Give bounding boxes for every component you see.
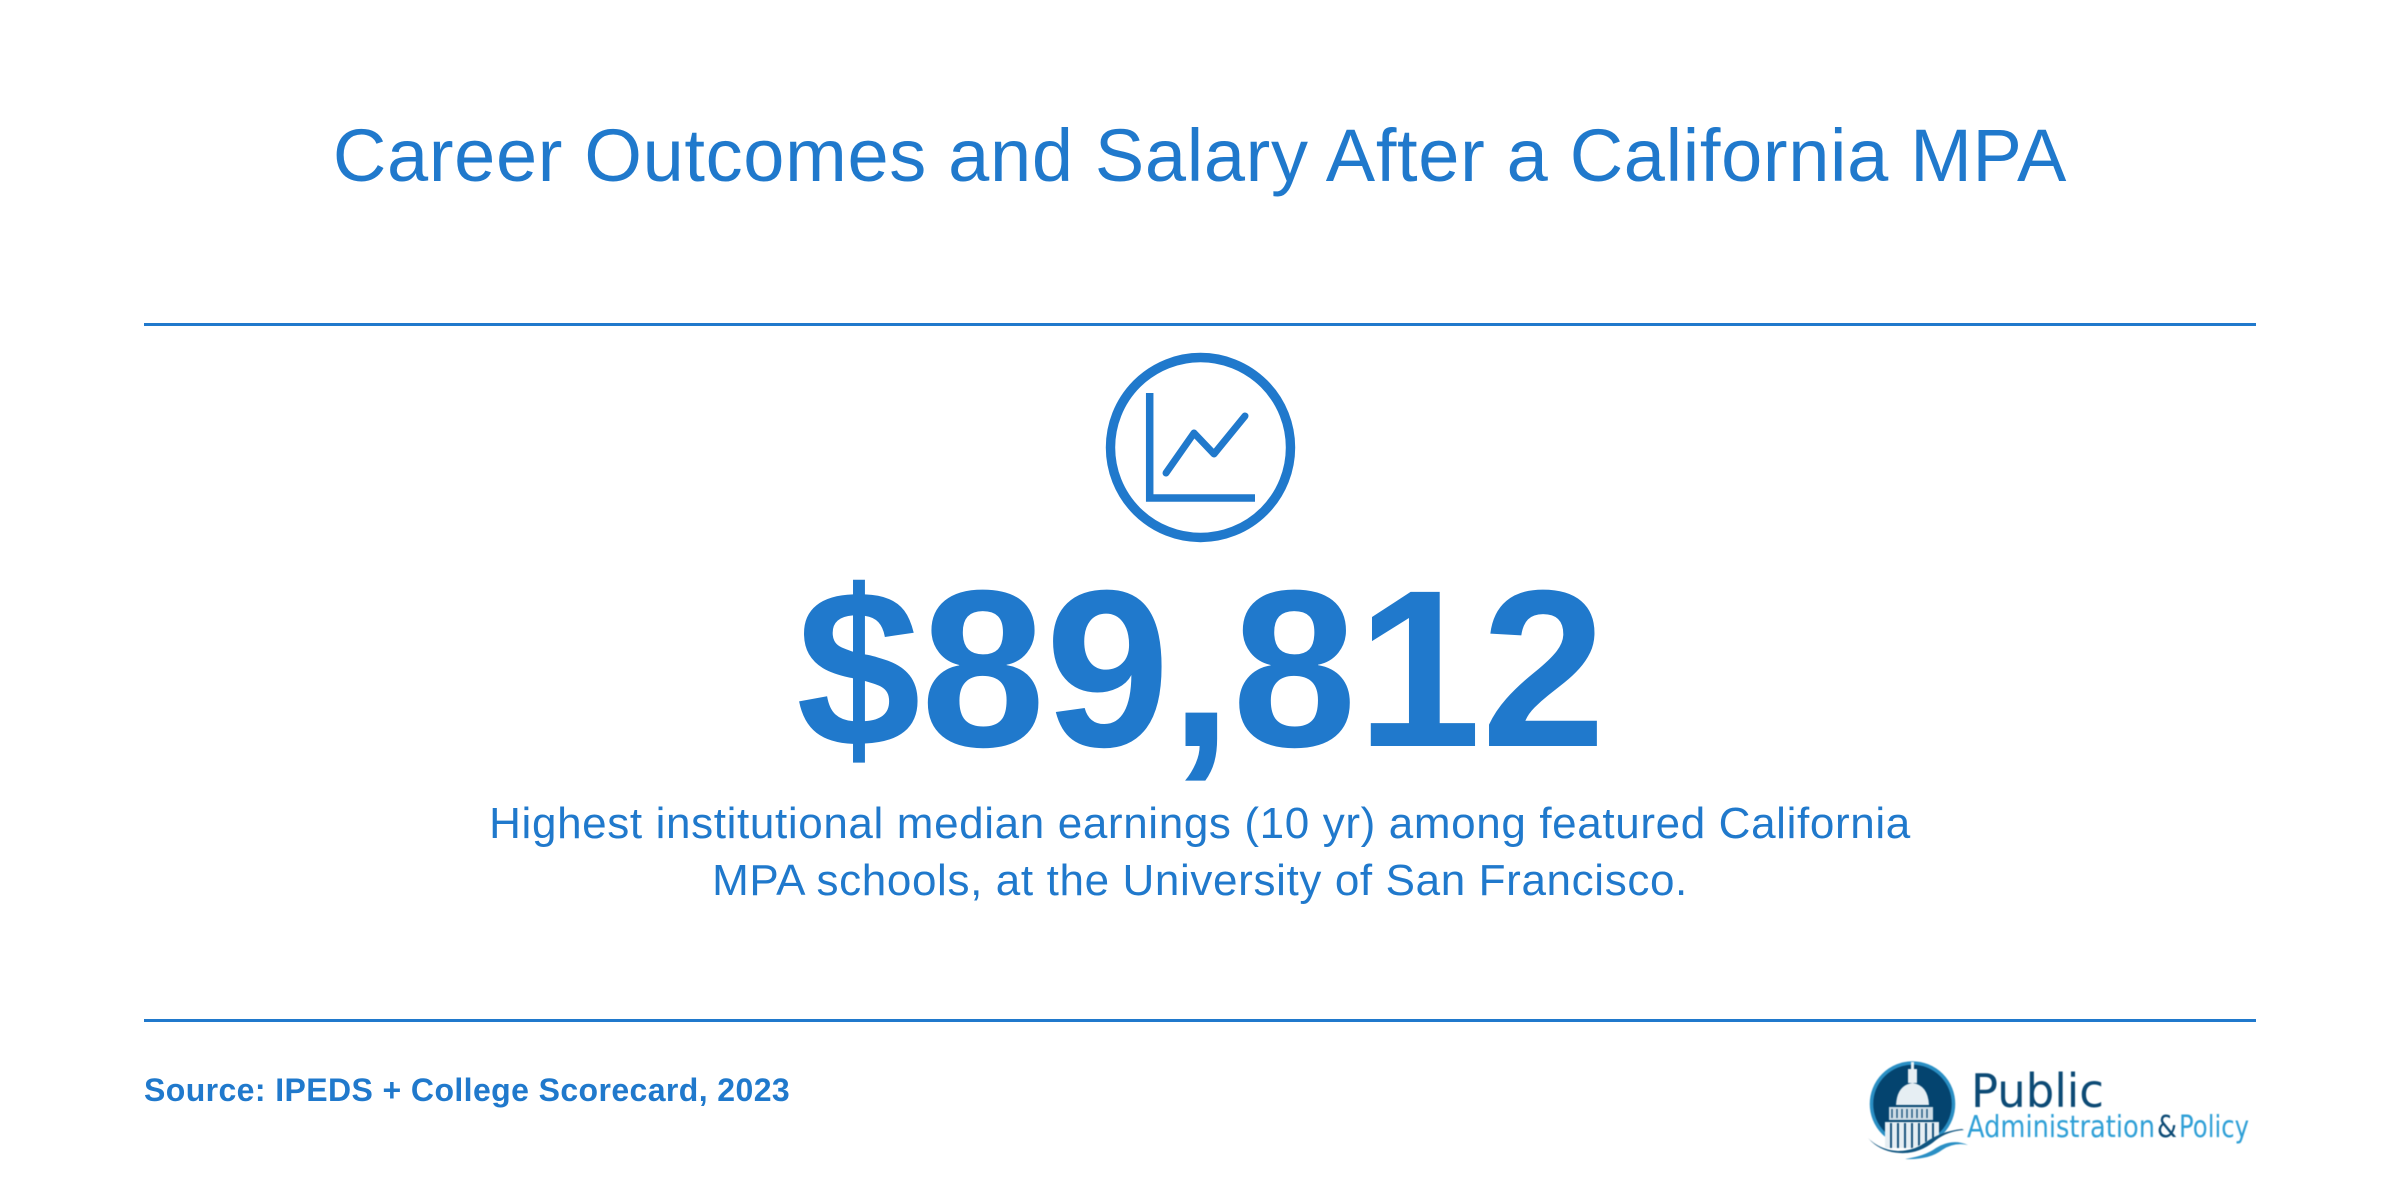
description: MPA schools, at the University of San Francisco. bbox=[712, 856, 1688, 905]
logo wordmark: Administration bbox=[1967, 1110, 2155, 1145]
description: Highest institutional median earnings (10 yr) among featured California bbox=[489, 799, 1911, 848]
title: Career Outcomes and Salary After a California MPA bbox=[333, 114, 2067, 197]
source note: Source: IPEDS + College Scorecard, 2023 bbox=[144, 1072, 790, 1108]
logo: Public Administration & Policy bbox=[1868, 1060, 2249, 1160]
logo wordmark: Public bbox=[1971, 1064, 2104, 1118]
big number: $89,812 bbox=[796, 544, 1606, 794]
logo wordmark bbox=[1967, 1064, 2249, 1145]
description bbox=[489, 799, 1911, 905]
logo emblem bbox=[1868, 1062, 1968, 1164]
logo wordmark: & bbox=[2157, 1110, 2177, 1145]
icon: line chart in circle bbox=[1106, 352, 1296, 542]
